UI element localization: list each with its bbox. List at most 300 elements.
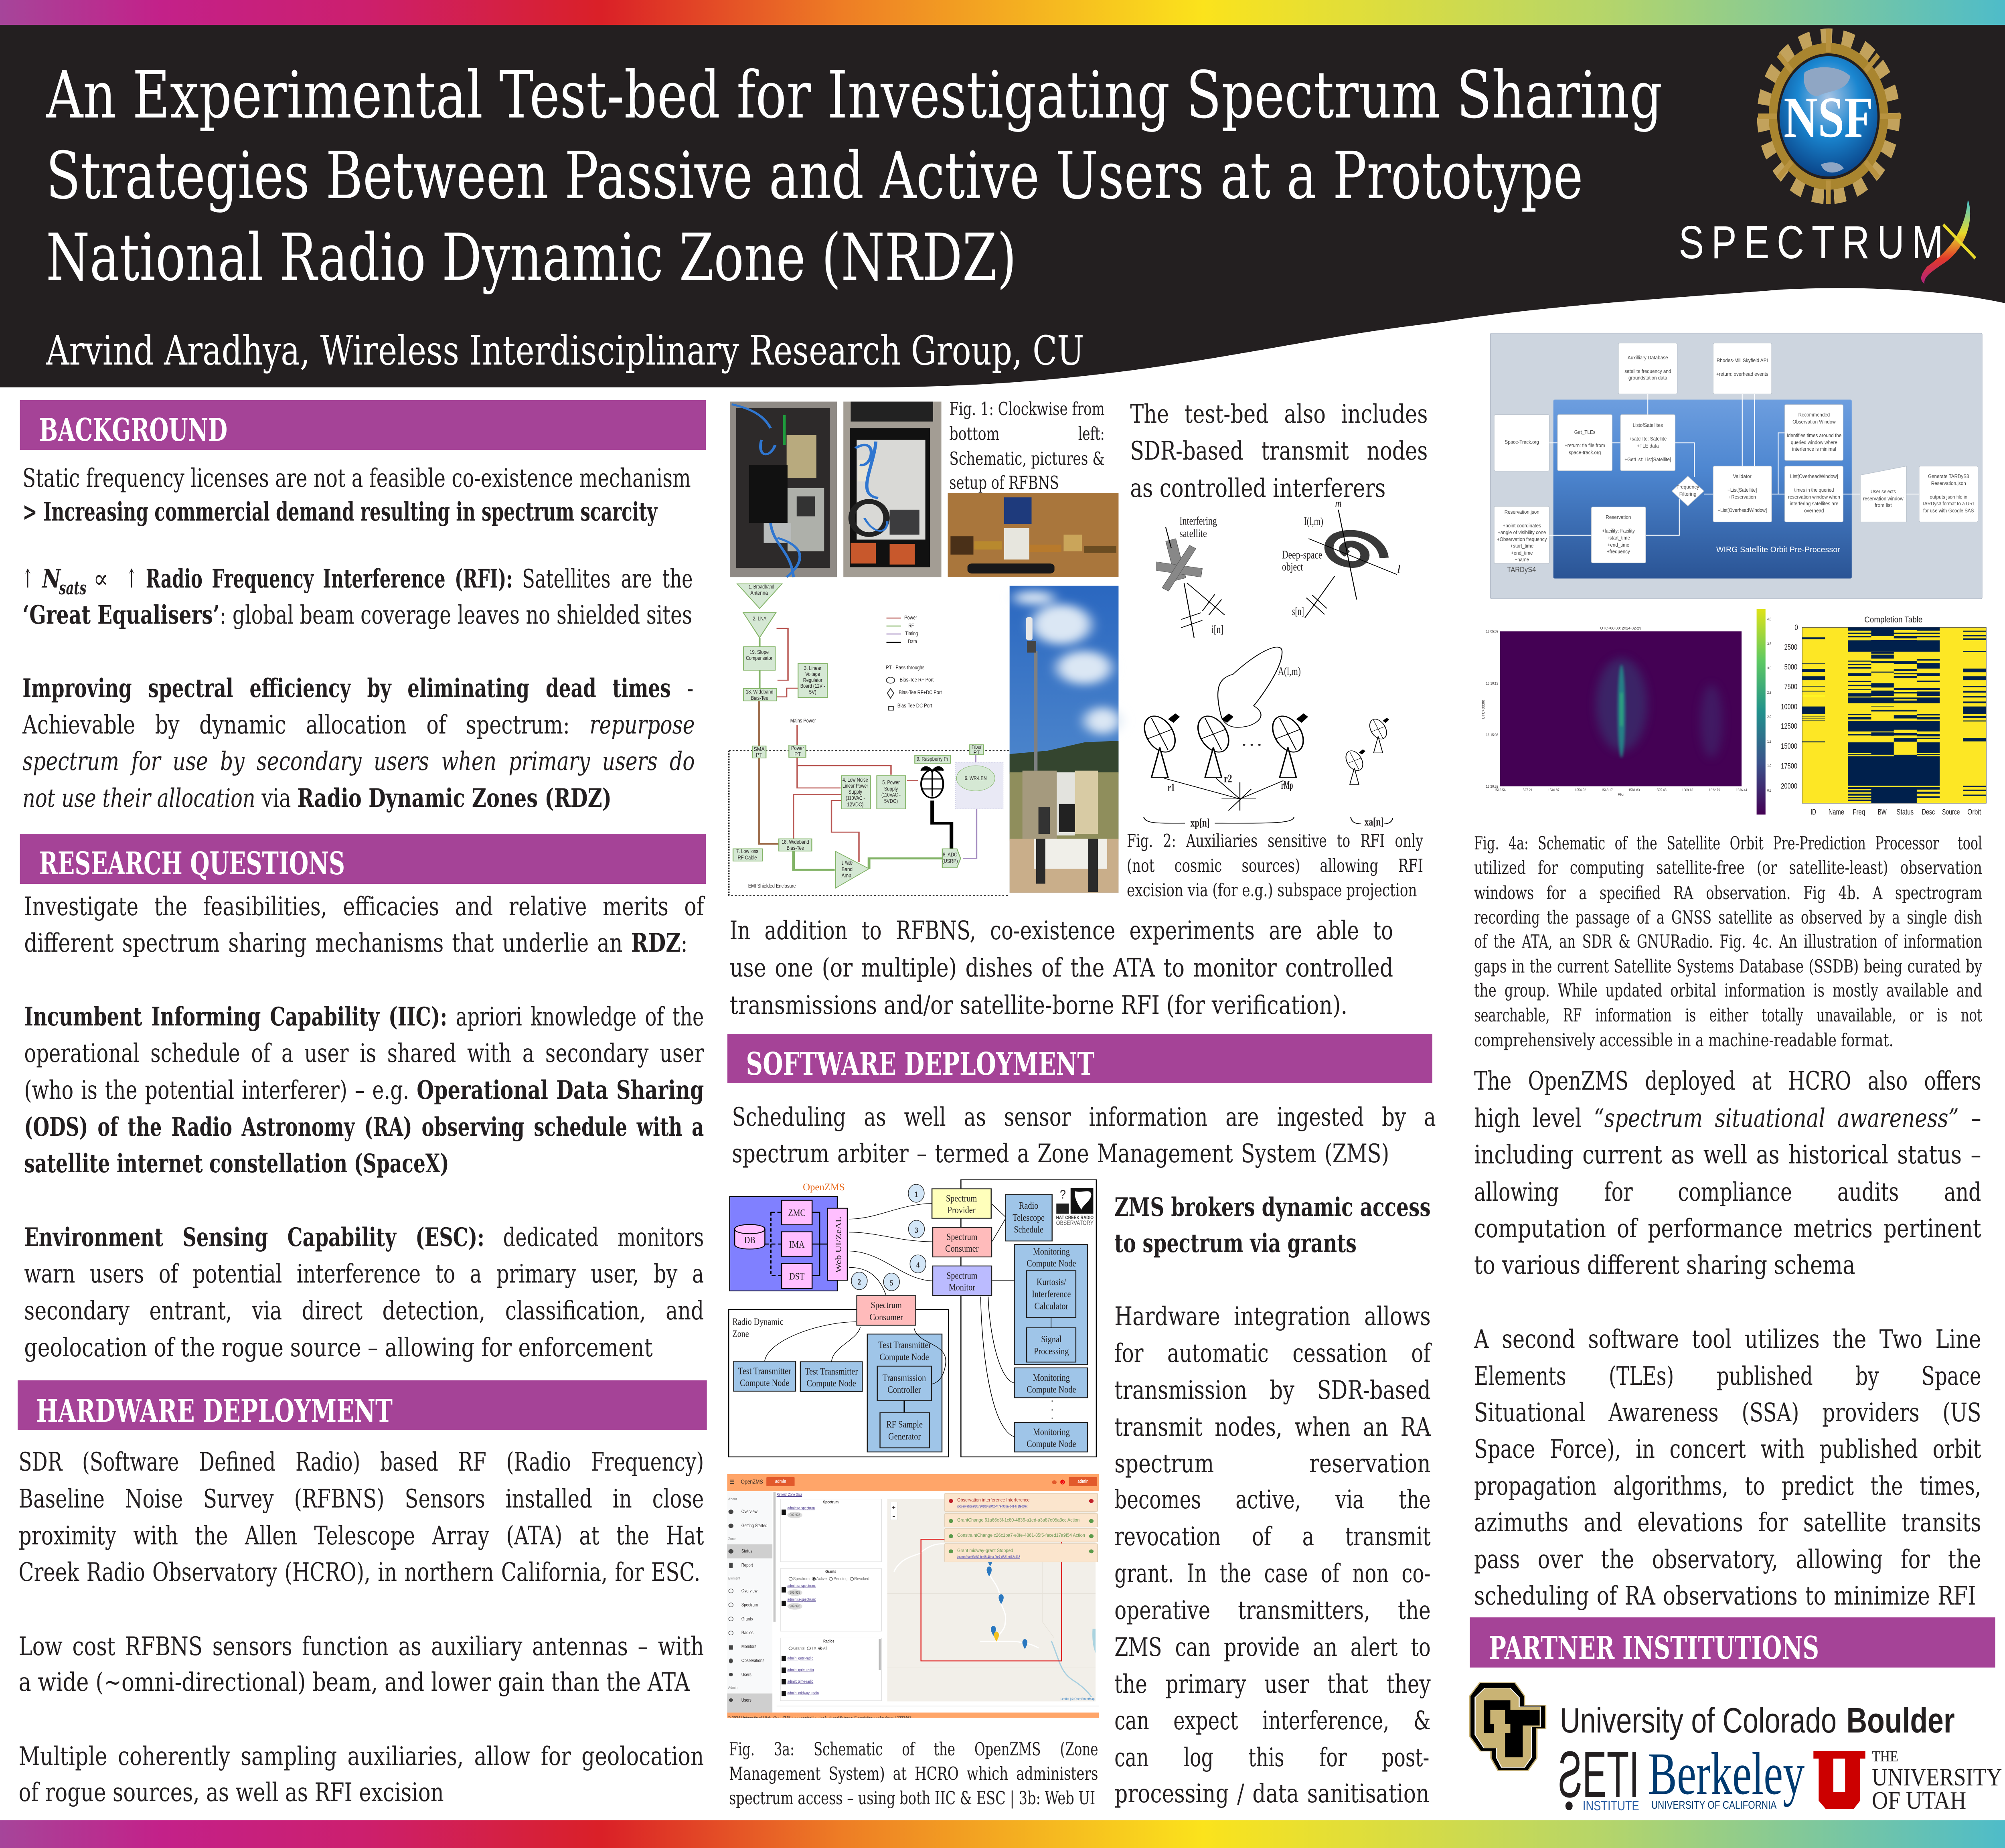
text block: research questions: (who is the potential interferer) – e.g. Operational Data Sharing <box>24 1075 704 1105</box>
text block: ZMS brokers: revocation of a transmit <box>1114 1522 1431 1551</box>
text block: ZMS brokers: to spectrum via grants <box>1114 1228 1357 1258</box>
sidebar: Zone <box>728 1537 736 1541</box>
heading: background: BACKGROUND <box>39 411 227 448</box>
text block: research questions: operational schedule of a user is shared with a secondary user <box>24 1038 704 1068</box>
caption: figure 4: comprehensively accessible in a machine-readable format. <box>1474 1029 1894 1051</box>
text block: background: Achievable by dynamic allocation of spectrum: repurpose <box>22 710 695 740</box>
figure 4c: completion table: 0 <box>1794 623 1798 632</box>
logo: CU Boulder: Boulder <box>1846 1700 1955 1740</box>
box: monitoring nodes: Schedule <box>1014 1224 1043 1235</box>
figure 4a: satellite orbit pre-processor: Frequency <box>1677 484 1699 490</box>
schematic: RFBNS block diagram: (110VAC - <box>881 792 901 798</box>
alerts: GrantChange 61a66e3f-1c80-4836-a1ed-a3a87e05a3cc Action <box>957 1517 1079 1523</box>
logo: Berkeley: Berkeley <box>1648 1740 1804 1807</box>
schematic: RFBNS block diagram: PT <box>794 751 801 757</box>
figure 2: interferometer with auxiliaries <box>1139 497 1401 829</box>
text block: hardware deployment: Multiple coherently sampling auxiliaries, allow for geolocation <box>18 1741 704 1771</box>
box: monitoring nodes: Compute Node <box>1027 1258 1076 1269</box>
text block: situational awareness: computation of performance metrics pertinent <box>1474 1214 1981 1243</box>
schematic: RFBNS block diagram: Power <box>904 614 917 621</box>
figure 4b: spectrogram: UTC+00:00: 2024-02-23 <box>1600 626 1641 630</box>
figure 4a: satellite orbit pre-processor: reservation window when <box>1788 494 1840 500</box>
figure 4a: satellite orbit pre-processor: Filtering <box>1679 491 1696 497</box>
logo: Berkeley: UNIVERSITY OF CALIFORNIA <box>1651 1799 1776 1812</box>
panel: research questions <box>20 834 706 1362</box>
logo: SETI Institute: INSTITUTE <box>1583 1799 1639 1814</box>
callouts: numbered steps: 3 <box>915 1226 918 1234</box>
cards: spectrum, grants, radios: Grants <box>793 1646 805 1651</box>
figure 4b: spectrogram: 1527.21 <box>1521 788 1532 792</box>
sidebar: Report <box>741 1562 753 1568</box>
figure 4a: satellite orbit pre-processor: outputs json file in <box>1930 494 1967 500</box>
text block: background: ↑ <box>126 564 137 594</box>
text block: situational awareness: pass over the observatory, allowing for the <box>1474 1544 1981 1574</box>
figure 4b: spectrogram: MHz <box>1618 793 1624 797</box>
schematic: RFBNS block diagram: Linear Power <box>843 782 868 789</box>
logo: University of Utah: THE <box>1872 1748 1898 1765</box>
figure 4a: satellite orbit pre-processor: Reservation.json <box>1505 509 1539 515</box>
figure 4a: satellite orbit pre-processor <box>1491 333 1982 599</box>
figure 4a: satellite orbit pre-processor: TARDys3 format to a URL <box>1922 500 1975 507</box>
text block: background: sats <box>59 577 87 599</box>
schematic: RFBNS block diagram: Band <box>842 866 853 872</box>
cards: spectrum, grants, radios: Radios <box>823 1639 834 1643</box>
sidebar: Overview <box>741 1588 757 1593</box>
text block: background: Radio Frequency Interference (RFI): <box>146 563 512 594</box>
box: spectrum roles: Spectrum <box>946 1270 978 1281</box>
caption: figure 4: utilized for computing satellite-free (or satellite-least) observation <box>1474 857 1982 878</box>
box: monitoring nodes: Compute Node <box>1027 1439 1076 1449</box>
icon: interfering satellite <box>1156 527 1225 638</box>
schematic: RFBNS block diagram: Compensator <box>746 655 772 661</box>
text block: test-bed transmit nodes: SDR-based transmit nodes <box>1130 436 1428 466</box>
figure 2: interferometer with auxiliaries: Deep-space <box>1282 549 1322 561</box>
text block: background: Satellites are the <box>522 564 693 594</box>
cards: spectrum, grants, radios: admin: gime-radio <box>788 1679 813 1684</box>
text block: background: > Increasing commercial demand resulting in spectrum scarcity <box>22 496 658 527</box>
text block: hardware deployment: Low cost RFBNS sensors function as auxiliary antennas – with <box>18 1631 704 1661</box>
figure 4a: satellite orbit pre-processor: Reservation.json <box>1931 480 1966 486</box>
box: spectrum roles: Spectrum <box>946 1193 977 1204</box>
box: spectrum roles <box>857 1189 992 1325</box>
schematic: RFBNS block diagram <box>729 584 1010 896</box>
figure 2: interferometer with auxiliaries: object <box>1282 561 1303 573</box>
box: OpenZMS core <box>730 1197 847 1291</box>
text block: ZMS brokers: Hardware integration allows <box>1114 1301 1431 1331</box>
figure 1: RFBNS pictures and schematic <box>729 401 1121 896</box>
icon: deep-space object <box>1305 510 1397 618</box>
figure 2: interferometer with auxiliaries: m <box>1335 497 1341 510</box>
logo: Hat Creek Radio Observatory: OBSERVATORY <box>1056 1220 1094 1226</box>
figure 4a: satellite orbit pre-processor: queried window where <box>1791 440 1837 446</box>
schematic: RFBNS block diagram: 8. ADC <box>943 851 958 858</box>
sidebar: Getting Started <box>741 1523 768 1528</box>
schematic: RFBNS block diagram: Bias-Tee RF Port <box>900 677 934 683</box>
figure 4a: satellite orbit pre-processor: +facility: Facility <box>1602 528 1635 534</box>
alerts: /observations/20720189-2842-4f7a-90ba-d41471fed8ac <box>957 1505 1028 1508</box>
heading: research questions <box>20 834 706 884</box>
caption: figure 2: excision via (for e.g.) subspace projection <box>1127 879 1417 901</box>
figure 4b: spectrogram: 1595.48 <box>1655 788 1667 792</box>
schematic: RFBNS block diagram: Power <box>791 745 804 752</box>
figure 4b: spectrogram: UTC+00:00 <box>1481 700 1485 719</box>
figure 2: interferometer with auxiliaries: satellite <box>1179 527 1207 540</box>
text block: situational awareness: scheduling of RA observations to minimize RFI <box>1474 1581 1976 1611</box>
figure 4a: satellite orbit pre-processor: List[OverheadWindow] <box>1790 473 1838 479</box>
header band <box>0 25 2005 387</box>
box: spectrum roles: Monitor <box>949 1282 975 1293</box>
schematic: RFBNS block diagram: Voltage <box>805 671 820 677</box>
text block: research questions: secondary entrant, via direct detection, classification, and <box>24 1296 704 1325</box>
heading: software deployment: SOFTWARE DEPLOYMENT <box>746 1046 1095 1082</box>
figure 4c: completion table: 5000 <box>1784 663 1797 672</box>
alerts: /grants/dac93d89-ba68-40ea-9fe7-d831b012a118 <box>957 1555 1020 1559</box>
colorbar <box>1757 609 1771 815</box>
schematic: RFBNS block diagram: PT <box>973 750 980 756</box>
figure 4b: spectrogram: 16:05:03 <box>1486 630 1498 634</box>
navbar <box>727 1474 1099 1491</box>
colorbar: 3.0 <box>1767 666 1771 670</box>
figure 4a: satellite orbit pre-processor: Reservation <box>1606 514 1631 520</box>
figure 4a: satellite orbit pre-processor: space-track.org <box>1569 450 1601 455</box>
panel: hardware deployment <box>18 1380 707 1807</box>
figure 4b: spectrogram: 1622.79 <box>1709 788 1720 792</box>
heading: hardware deployment: HARDWARE DEPLOYMENT <box>36 1392 393 1429</box>
figure 4a: satellite orbit pre-processor: ListofSatellites <box>1633 422 1663 428</box>
text block: research questions: Incumbent Informing Capability (IIC): apriori knowledge of the <box>24 1001 704 1031</box>
schematic: RFBNS block diagram: 12VDC) <box>847 801 863 808</box>
box: radio dynamic zone: Test Transmitter <box>805 1366 858 1377</box>
schematic: RFBNS block diagram: Antenna <box>750 590 768 596</box>
box: monitoring nodes: Processing <box>1034 1346 1069 1356</box>
text block: ATA dishes: In addition to RFBNS, co-existence experiments are able to <box>730 916 1393 945</box>
schematic: RFBNS block diagram: Bias-Tee <box>751 695 768 701</box>
figure 4a: satellite orbit pre-processor: +return: overhead events <box>1716 371 1768 377</box>
box: spectrum roles: Spectrum <box>946 1231 978 1242</box>
figure 4b: spectrogram: 1568.17 <box>1602 788 1613 792</box>
figure 2: interferometer with auxiliaries: xp[n] <box>1191 817 1210 829</box>
figure 4a: satellite orbit pre-processor: Generate TARDyS3 <box>1928 473 1969 479</box>
figure 4c: completion table: Orbit <box>1967 808 1981 817</box>
text block: ATA dishes: transmissions and/or satellite-borne RFI (for verification). <box>730 990 1347 1020</box>
schematic: RFBNS block diagram: Bias-Tee RF+DC Port <box>899 689 942 695</box>
schematic: RFBNS block diagram: (110VAC - <box>846 795 865 801</box>
box: radio dynamic zone: Controller <box>887 1384 921 1395</box>
caption: figure 4: the group. While updated orbital information is mostly available and <box>1474 980 1982 1001</box>
schematic: RFBNS block diagram: PT <box>756 752 762 758</box>
caption: figure 3: Fig. 3a: Schematic of the OpenZMS (Zone <box>729 1739 1098 1760</box>
text block: background: Static frequency licenses are not a feasible co-existence mechanism <box>22 463 691 493</box>
box: OpenZMS core: IMA <box>789 1239 805 1250</box>
text block: ATA dishes <box>730 916 1393 1020</box>
bottom rainbow bar <box>0 1820 2005 1848</box>
text block: hardware deployment: proximity with the Allen Telescope Array (ATA) at the Hat <box>18 1521 704 1550</box>
text block: scheduling intro: Scheduling as well as sensor information are ingested by a <box>732 1102 1436 1132</box>
box: radio dynamic zone <box>729 1309 948 1457</box>
logo: University of Utah: UNIVERSITY <box>1872 1764 2002 1791</box>
figure 2: interferometer with auxiliaries: ... <box>1242 736 1262 748</box>
figure 4a: satellite orbit pre-processor: Rhodes-Mill Skyfield API <box>1717 357 1768 363</box>
figure 4a: satellite orbit pre-processor: Recommended <box>1798 412 1830 418</box>
sidebar: Admin <box>728 1686 737 1690</box>
figure 4b: spectrogram: 16:20:52 <box>1486 784 1498 788</box>
schematic: RFBNS block diagram: Board (12V - <box>800 683 825 689</box>
figure 4c: completion table: Completion Table <box>1864 614 1922 624</box>
figure 4c: completion table: BW <box>1878 808 1887 817</box>
caption: figure 1 <box>949 398 1105 493</box>
colorbar: 0.5 <box>1767 788 1771 792</box>
text block: background: not use their allocation via Radio Dynamic Zones (RDZ) <box>22 783 612 813</box>
box: OpenZMS core: ZMC <box>788 1208 806 1218</box>
figure 4a: satellite orbit pre-processor: interfernce is minimal <box>1792 446 1836 452</box>
text block: situational awareness: Elements (TLEs) published by Space <box>1474 1361 1981 1391</box>
text block: ZMS brokers: processing / data sanitisation <box>1114 1779 1429 1808</box>
figure 4a: satellite orbit pre-processor: +point coordinates <box>1503 523 1541 529</box>
box: radio dynamic zone: Transmission <box>883 1372 926 1383</box>
box: monitoring nodes: Signal <box>1041 1333 1061 1344</box>
text block: research questions: different spectrum sharing mechanisms that underlie an RDZ: <box>24 928 688 958</box>
sidebar: Grants <box>741 1616 753 1621</box>
figure 4c: completion table: Status <box>1897 808 1914 817</box>
box: monitoring nodes: Compute Node <box>1027 1384 1076 1395</box>
figure 4a: satellite orbit pre-processor: groundstation data <box>1628 375 1667 381</box>
figure 4b: spectrogram: 16:10:19 <box>1486 681 1498 685</box>
schematic: RFBNS block diagram: 6. WR-LEN <box>965 775 987 781</box>
schematic: RFBNS block diagram: SMA <box>753 746 765 752</box>
figure 4a: satellite orbit pre-processor: +Observation frequency <box>1497 536 1547 542</box>
text block: ZMS brokers: transmission by SDR-based <box>1114 1375 1431 1405</box>
photo: sensor box open <box>730 401 837 577</box>
schematic: RFBNS block diagram: Fiber <box>972 744 982 750</box>
logo: CU Boulder: University of Colorado <box>1560 1700 1837 1740</box>
figure 4b: spectrogram: 1540.87 <box>1548 788 1559 792</box>
callouts: numbered steps <box>851 1184 926 1291</box>
text block: situational awareness: azimuths and elevations for satellite transits <box>1474 1508 1981 1537</box>
text block: situational awareness <box>1474 1066 1981 1611</box>
colorbar: 1.0 <box>1767 764 1771 768</box>
cards: spectrum, grants, radios: 902-928 <box>790 1513 800 1517</box>
text block: hardware deployment <box>18 1447 704 1807</box>
schematic: RFBNS block diagram: 5. Power <box>882 779 900 786</box>
box: monitoring nodes: Monitoring <box>1033 1246 1070 1257</box>
figure 4a: satellite orbit pre-processor: for use with Google SAS <box>1923 508 1974 513</box>
cards: spectrum, grants, radios: admin:ra-spectrum <box>788 1506 815 1510</box>
caption: figure 2: (not cosmic sources) allowing RFI <box>1127 855 1423 876</box>
figure 4c: completion table: 10000 <box>1781 703 1797 711</box>
text block: situational awareness: including current as well as historical status – <box>1474 1140 1981 1169</box>
figure 3b: OpenZMS web UI <box>725 1474 1100 1722</box>
figure 4a: satellite orbit pre-processor: +end_time <box>1511 550 1533 556</box>
text block: ZMS brokers: for automatic cessation of <box>1114 1338 1432 1368</box>
figure 4a: satellite orbit pre-processor: times in the queried <box>1794 487 1834 493</box>
figure 4b: spectrogram: 16:15:36 <box>1486 733 1498 737</box>
title: National Radio Dynamic Zone (NRDZ) <box>46 220 1017 295</box>
figure 4a: satellite orbit pre-processor: Auxilliary Database <box>1628 355 1668 361</box>
text block: hardware deployment: a wide (~omni-directional) beam, and lower gain than the ATA <box>18 1667 690 1697</box>
figure 4a: satellite orbit pre-processor: User selects <box>1871 488 1896 494</box>
schematic: RFBNS block diagram: 9. Raspberry Pi <box>917 756 948 762</box>
schematic: RFBNS block diagram: Bias-Tee <box>787 845 804 851</box>
figure 2: interferometer with auxiliaries: r1 <box>1168 782 1175 794</box>
figure 4a: satellite orbit pre-processor: TARDyS4 <box>1507 565 1536 574</box>
cards: spectrum, grants, radios: admin:ra-spectrum: <box>788 1597 816 1602</box>
figure 4a: satellite orbit pre-processor: +name <box>1515 557 1529 562</box>
text block: background: spectrum for use by secondary users when primary users do <box>22 746 695 776</box>
figure 4b: spectrogram: 1554.52 <box>1575 788 1586 792</box>
text block: background <box>22 463 695 813</box>
caption: figure 1: left: <box>1078 423 1105 444</box>
figure 4a: satellite orbit pre-processor: Observation Window <box>1792 419 1836 425</box>
logo: University of Utah: OF UTAH <box>1872 1787 1966 1814</box>
top rainbow bar <box>0 0 2005 25</box>
figure 4a: satellite orbit pre-processor: satellite frequency and <box>1624 368 1671 374</box>
figure 4a: satellite orbit pre-processor: +start_time <box>1510 543 1533 549</box>
heading: partner institutions <box>1470 1617 1995 1668</box>
text block: ZMS brokers: ZMS can provide an alert to <box>1114 1632 1431 1662</box>
logo: SpectrumX <box>1679 199 1975 284</box>
figure 4c: completion table: 2500 <box>1784 643 1797 652</box>
text block: research questions: Investigate the feasibilities, efficacies and relative merits of <box>24 892 705 921</box>
text block: scheduling intro <box>732 1102 1436 1168</box>
heading: partner institutions: PARTNER INSTITUTIONS <box>1489 1629 1819 1666</box>
sidebar: Users <box>741 1672 751 1677</box>
text block: situational awareness: propagation algorithms, to predict the times, <box>1474 1471 1981 1501</box>
text block: hardware deployment: SDR (Software Defined Radio) based RF (Radio Frequency) <box>18 1447 704 1477</box>
caption: figure 2 <box>1127 830 1424 901</box>
schematic: RFBNS block diagram: Timing <box>905 630 918 637</box>
box: monitoring nodes <box>1005 1194 1088 1452</box>
box: OpenZMS core: Web UI/ZeAL <box>834 1216 843 1273</box>
text block: background: ‘Great Equalisers’: global beam coverage leaves no shielded sites <box>22 600 692 630</box>
heading: background <box>20 400 706 450</box>
sidebar: Observations <box>741 1658 764 1664</box>
schematic: RFBNS block diagram: PT - Pass-throughs <box>886 664 924 671</box>
figure 4c: completion table: Name <box>1829 808 1844 817</box>
box: spectrum roles: Spectrum <box>871 1300 902 1311</box>
sidebar: Radios <box>741 1630 753 1635</box>
logo: University of Utah <box>1813 1748 2002 1814</box>
figure 4a: satellite orbit pre-processor: +TLE data <box>1637 443 1659 449</box>
logo: Hat Creek Radio Observatory: HAT CREEK RADIO <box>1056 1215 1094 1220</box>
logo: Hat Creek Radio Observatory: ? <box>1060 1187 1066 1201</box>
figure 4a: satellite orbit pre-processor: +List[OverheadWindow] <box>1717 507 1767 513</box>
sidebar: Monitors <box>741 1644 756 1649</box>
schematic: RFBNS block diagram: 18. Wideband <box>782 839 809 845</box>
text block: situational awareness: allowing for compliance audits and <box>1474 1177 1981 1207</box>
cards: spectrum, grants, radios: admin: gate_radio <box>788 1668 814 1672</box>
heading: software deployment <box>727 1034 1432 1083</box>
figure 2: interferometer with auxiliaries: xa[n] <box>1365 816 1383 828</box>
schematic: RFBNS block diagram: 5VDC) <box>884 798 898 804</box>
text block: ZMS brokers: transmit nodes, when an RA <box>1114 1412 1431 1442</box>
text block: situational awareness: Space Force), in concert with published orbit <box>1474 1434 1981 1464</box>
box: OpenZMS core: DB <box>744 1234 755 1245</box>
figure 4a: satellite orbit pre-processor: Validator <box>1733 473 1752 479</box>
text block: test-bed transmit nodes: as controlled interferers <box>1130 473 1385 503</box>
figure 4c: completion table: ID <box>1811 808 1816 817</box>
box: monitoring nodes: Kurtosis/ <box>1037 1277 1066 1287</box>
figure 4c: completion table: 12500 <box>1781 722 1797 731</box>
heading: hardware deployment <box>18 1380 707 1430</box>
cards: spectrum, grants, radios: Pending <box>834 1576 848 1581</box>
figure 4a: satellite orbit pre-processor: +Reservation <box>1729 494 1756 500</box>
figure 4a: satellite orbit pre-processor: +satellite: Satellite <box>1629 436 1667 442</box>
figure 4c: completion table: 7500 <box>1784 683 1797 691</box>
box: spectrum roles: Consumer <box>869 1311 903 1322</box>
cards: spectrum, grants, radios: Spectrum <box>793 1576 810 1581</box>
figure 2: interferometer with auxiliaries: I(l,m) <box>1304 515 1323 528</box>
logo: NSF: NSF <box>1784 85 1873 150</box>
title <box>46 57 1663 295</box>
schematic: RFBNS block diagram: 19. Slope <box>749 649 769 655</box>
figure 4a: satellite orbit pre-processor: overhead <box>1804 508 1824 513</box>
text block: ZMS brokers: reservation <box>1309 1449 1431 1478</box>
figure 4a: satellite orbit pre-processor: Space-Track.org <box>1505 439 1539 445</box>
logo: SETI Institute: ƧETI <box>1558 1738 1639 1811</box>
box: radio dynamic zone: Compute Node <box>879 1352 929 1362</box>
box: radio dynamic zone: Zone <box>732 1328 749 1339</box>
footer bar <box>725 1706 1100 1722</box>
text block: background: N <box>41 563 62 594</box>
colorbar: 1.5 <box>1767 740 1771 744</box>
schematic: RFBNS block diagram: RF <box>908 622 914 629</box>
schematic: RFBNS block diagram: Supply <box>884 786 898 792</box>
sidebar: Spectrum <box>741 1602 758 1607</box>
logo: NSF <box>1758 29 1901 204</box>
schematic: RFBNS block diagram: 2. LNA <box>753 615 767 622</box>
colorbar: 3.5 <box>1767 642 1771 646</box>
title: Strategies Between Passive and Active Users at a Prototype <box>46 138 1583 213</box>
photo: sensor tower at HCRO <box>1010 586 1121 893</box>
navbar: OpenZMS <box>741 1479 763 1485</box>
schematic: RFBNS block diagram: EMI Shielded Enclosure <box>748 883 796 889</box>
sidebar: Element <box>728 1576 740 1581</box>
alerts: ConstraintChange c26c1ba7-e0fe-4861-85f5-faced17a9f54 Action <box>957 1532 1085 1538</box>
cards: spectrum, grants, radios: Active <box>816 1576 827 1581</box>
figure 4a: satellite orbit pre-processor: from list <box>1875 502 1892 508</box>
sidebar: About <box>728 1497 737 1502</box>
figure 4a: satellite orbit pre-processor: Identifies times around the <box>1787 432 1841 438</box>
colorbar: 4.0 <box>1767 617 1771 621</box>
figure 4c: completion table: Freq <box>1853 808 1865 817</box>
box: radio dynamic zone: Compute Node <box>806 1378 856 1389</box>
schematic: RFBNS block diagram: 1. Broadband <box>749 584 774 590</box>
callouts: numbered steps: 1 <box>915 1190 918 1199</box>
text block: ZMS brokers: grant. In the case of non co- <box>1114 1558 1431 1588</box>
figure 4a: satellite orbit pre-processor: +start_time <box>1607 535 1630 541</box>
figure 4b: spectrogram: 1513.56 <box>1495 788 1506 792</box>
text block: research questions: Environment Sensing Capability (ESC): dedicated monitors <box>24 1222 704 1252</box>
sidebar <box>727 1491 776 1712</box>
figure 4c: completion table: Source <box>1942 808 1960 817</box>
cards: spectrum, grants, radios <box>777 1493 881 1701</box>
schematic: RFBNS block diagram: 2. Wide <box>842 860 853 866</box>
figure 4a: satellite orbit pre-processor: reservation window <box>1863 496 1904 502</box>
figure 3a: OpenZMS schematic <box>729 1180 1096 1457</box>
figure 4a: satellite orbit pre-processor: WIRG Satellite Orbit Pre-Processor <box>1716 545 1840 554</box>
figure 4c: completion table: Desc <box>1922 808 1935 817</box>
schematic: RFBNS block diagram: 18. Wideband <box>746 689 774 695</box>
box: radio dynamic zone: Test Transmitter <box>738 1366 791 1376</box>
box: monitoring nodes: Interference <box>1032 1289 1071 1299</box>
caption: figure 2: Fig. 2: Auxiliaries sensitive to RFI only <box>1127 830 1424 851</box>
text block: hardware deployment: Creek Radio Observatory (HCRO), in northern California, for ESC. <box>18 1557 700 1587</box>
figure 4a: satellite orbit pre-processor: +end_time <box>1608 542 1629 548</box>
box: monitoring nodes: Monitoring <box>1033 1372 1070 1383</box>
logo: CU Boulder <box>1470 1683 1955 1771</box>
text block: ZMS brokers: can log this for post- <box>1114 1743 1429 1772</box>
figure 4b: spectrogram: 1609.13 <box>1682 788 1693 792</box>
